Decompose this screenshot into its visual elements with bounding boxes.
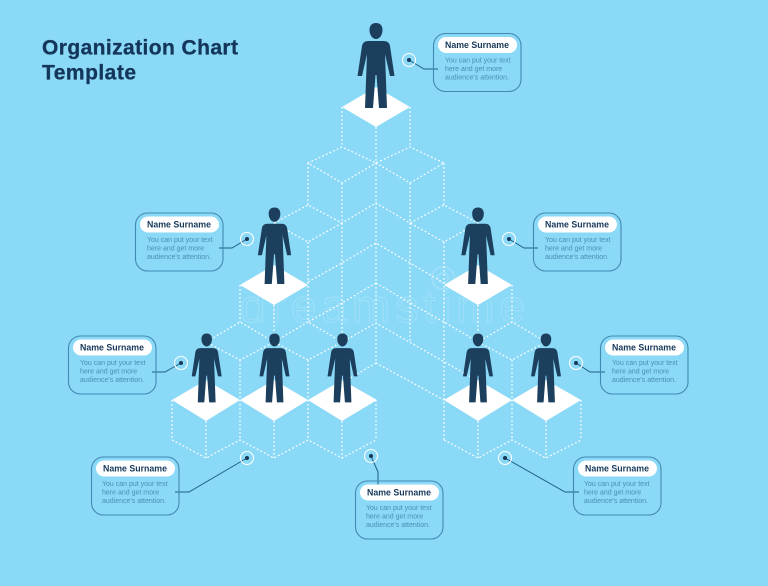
callout: lower right: Name Surname	[612, 342, 676, 352]
callout: lower right: You can put your text	[612, 360, 678, 367]
callout: bottom left: Name Surname	[103, 464, 167, 474]
person: middle left	[258, 208, 291, 284]
callout: middle right: here and get more	[545, 246, 602, 252]
callout: lower left: Name Surname	[80, 342, 144, 352]
callout: middle left: You can put your text	[147, 237, 213, 244]
callout: bottom centre	[356, 450, 443, 539]
person: lower 2	[260, 334, 289, 402]
callout: middle right: audience's attention.	[545, 254, 609, 261]
callout: middle left: here and get more	[147, 246, 204, 252]
callout: middle right: Name Surname	[545, 220, 609, 230]
callout: bottom left	[92, 452, 254, 515]
person: middle right	[461, 208, 495, 284]
title: Template	[42, 62, 136, 84]
callout: bottom right: Name Surname	[585, 464, 649, 474]
callout: bottom right: You can put your text	[584, 481, 650, 488]
person: lower 1	[192, 334, 222, 402]
platform tiles	[172, 87, 581, 421]
dotted isometric cube lattice	[172, 107, 581, 458]
callout: middle left: audience's attention.	[147, 254, 211, 261]
callout: top: You can put your text	[445, 58, 511, 64]
callout: lower left	[68, 336, 188, 394]
callout: top	[402, 34, 521, 92]
title: Organization Chart	[42, 36, 238, 60]
callout: lower right: audience's attention.	[612, 377, 676, 384]
callout: top: Name Surname	[445, 40, 509, 50]
callout: middle right: You can put your text	[545, 237, 611, 244]
callout: bottom left: You can put your text	[102, 481, 168, 488]
callout: bottom right: here and get more	[584, 490, 641, 496]
person: lower 4	[463, 334, 493, 402]
person: lower 3	[328, 334, 357, 402]
callout: top: audience's attention.	[445, 74, 509, 82]
callout: bottom centre: audience's attention.	[366, 522, 430, 529]
callout: middle left	[136, 213, 254, 271]
person: top manager	[358, 23, 394, 108]
callout: lower right: here and get more	[612, 368, 669, 376]
callout: lower right	[570, 336, 688, 394]
person: lower 5	[531, 334, 561, 402]
callout: bottom centre: Name Surname	[367, 488, 431, 498]
callout: middle left: Name Surname	[147, 220, 211, 230]
callout: bottom centre: You can put your text	[366, 505, 432, 512]
callout: bottom right	[498, 452, 661, 515]
callout: top: here and get more	[445, 66, 502, 73]
title	[42, 36, 238, 84]
callout: middle right	[502, 213, 621, 271]
callout: bottom centre: here and get more	[366, 514, 423, 520]
callout: lower left: You can put your text	[80, 360, 146, 367]
callout: bottom right: audience's attention.	[584, 498, 648, 505]
callout: bottom left: audience's attention.	[102, 498, 166, 505]
watermark: dreamstime	[240, 280, 525, 332]
callout: bottom left: here and get more	[102, 490, 159, 496]
callout: lower left: here and get more	[80, 368, 137, 376]
callout: lower left: audience's attention.	[80, 377, 144, 384]
